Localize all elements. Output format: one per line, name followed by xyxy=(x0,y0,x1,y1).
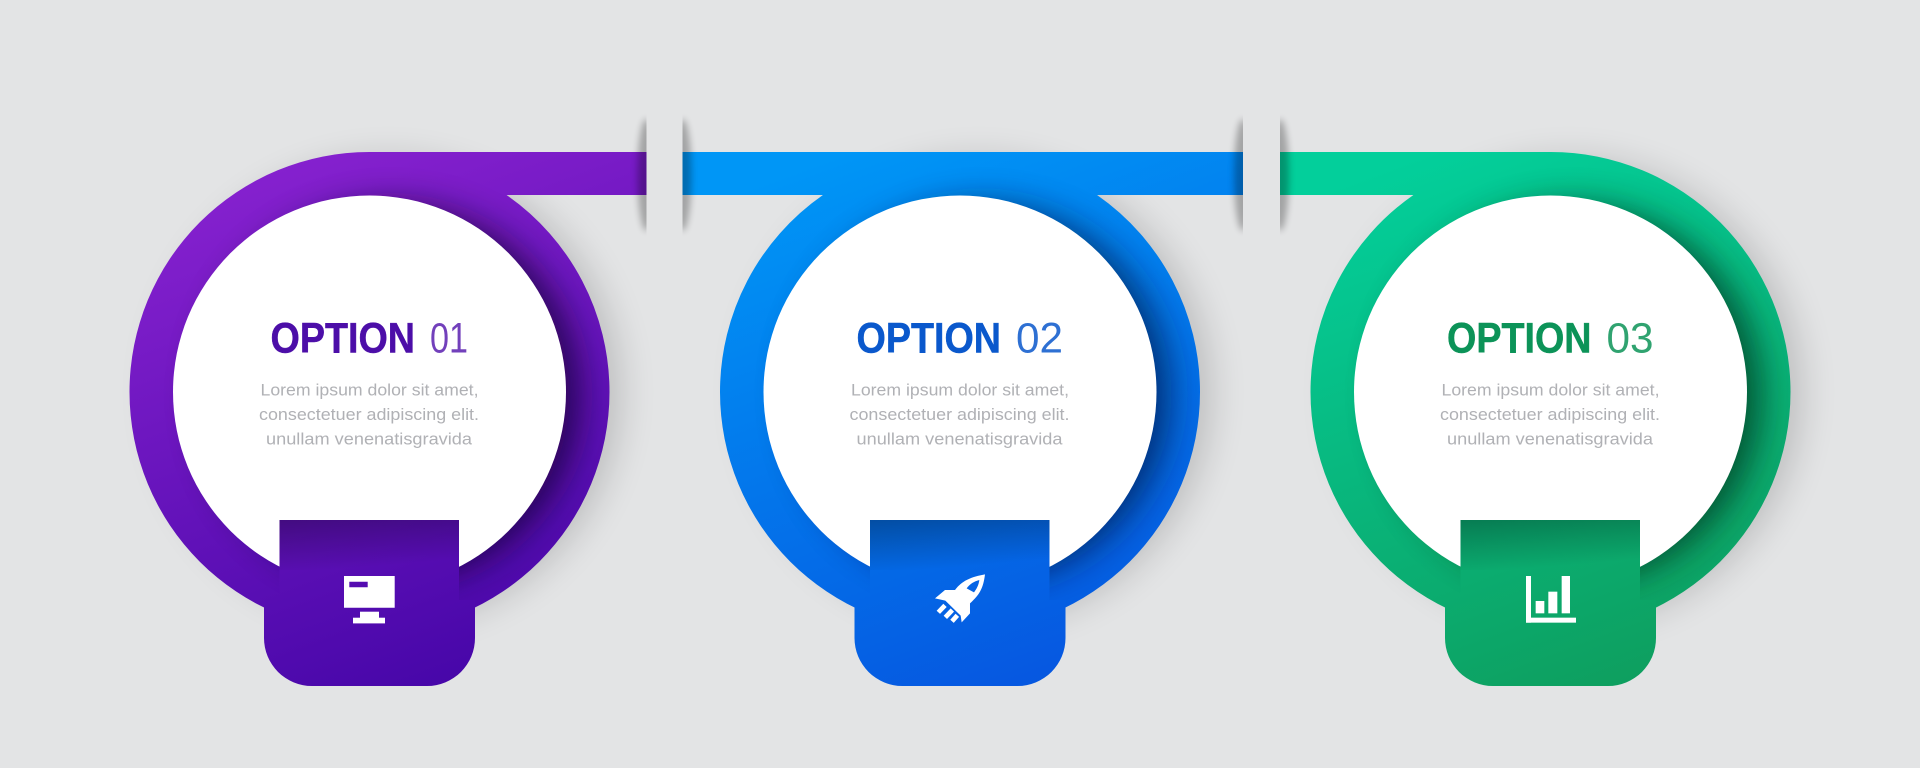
panel: option 02 xyxy=(670,140,1260,700)
ring and connector bar: purple xyxy=(130,152,646,608)
tab 01 xyxy=(264,520,475,686)
tab 03 xyxy=(1445,520,1656,686)
ring and connector bar: green xyxy=(1280,152,1790,608)
description 03 xyxy=(1440,382,1660,448)
heading: option 02: OPTION xyxy=(856,314,1001,362)
gap 1 between bars xyxy=(638,100,692,250)
panel: option 03 xyxy=(1270,140,1830,700)
tab 02 xyxy=(854,520,1066,686)
icon: bar chart xyxy=(1526,576,1576,623)
white circle 03 xyxy=(1354,196,1747,588)
description 01: unullam venenatisgravida xyxy=(266,430,473,448)
description 01: Lorem ipsum dolor sit amet, xyxy=(260,382,478,400)
heading: option 01: OPTION xyxy=(270,314,415,362)
description 01: consectetuer adipiscing elit. xyxy=(259,406,479,424)
description 03: Lorem ipsum dolor sit amet, xyxy=(1442,382,1660,400)
description 02: unullam venenatisgravida xyxy=(856,430,1063,448)
description 02 xyxy=(850,382,1070,448)
ring and connector bar: blue xyxy=(682,152,1243,608)
heading: option 01: 01 xyxy=(430,314,468,362)
description 01 xyxy=(259,382,479,448)
white circle 02 xyxy=(764,196,1156,588)
description 02: consectetuer adipiscing elit. xyxy=(850,406,1070,424)
panel: option 01 xyxy=(130,146,646,686)
heading: option 03: OPTION xyxy=(1447,314,1592,362)
icon: monitor xyxy=(344,576,395,623)
description 03: unullam venenatisgravida xyxy=(1447,430,1654,448)
gap 2 between bars xyxy=(1234,100,1289,250)
icon: rocket xyxy=(935,574,985,622)
white circle 01 xyxy=(173,196,566,588)
description 02: Lorem ipsum dolor sit amet, xyxy=(851,382,1069,400)
heading: option 03: 03 xyxy=(1606,314,1654,362)
description 03: consectetuer adipiscing elit. xyxy=(1440,406,1660,424)
heading: option 02: 02 xyxy=(1016,314,1063,362)
